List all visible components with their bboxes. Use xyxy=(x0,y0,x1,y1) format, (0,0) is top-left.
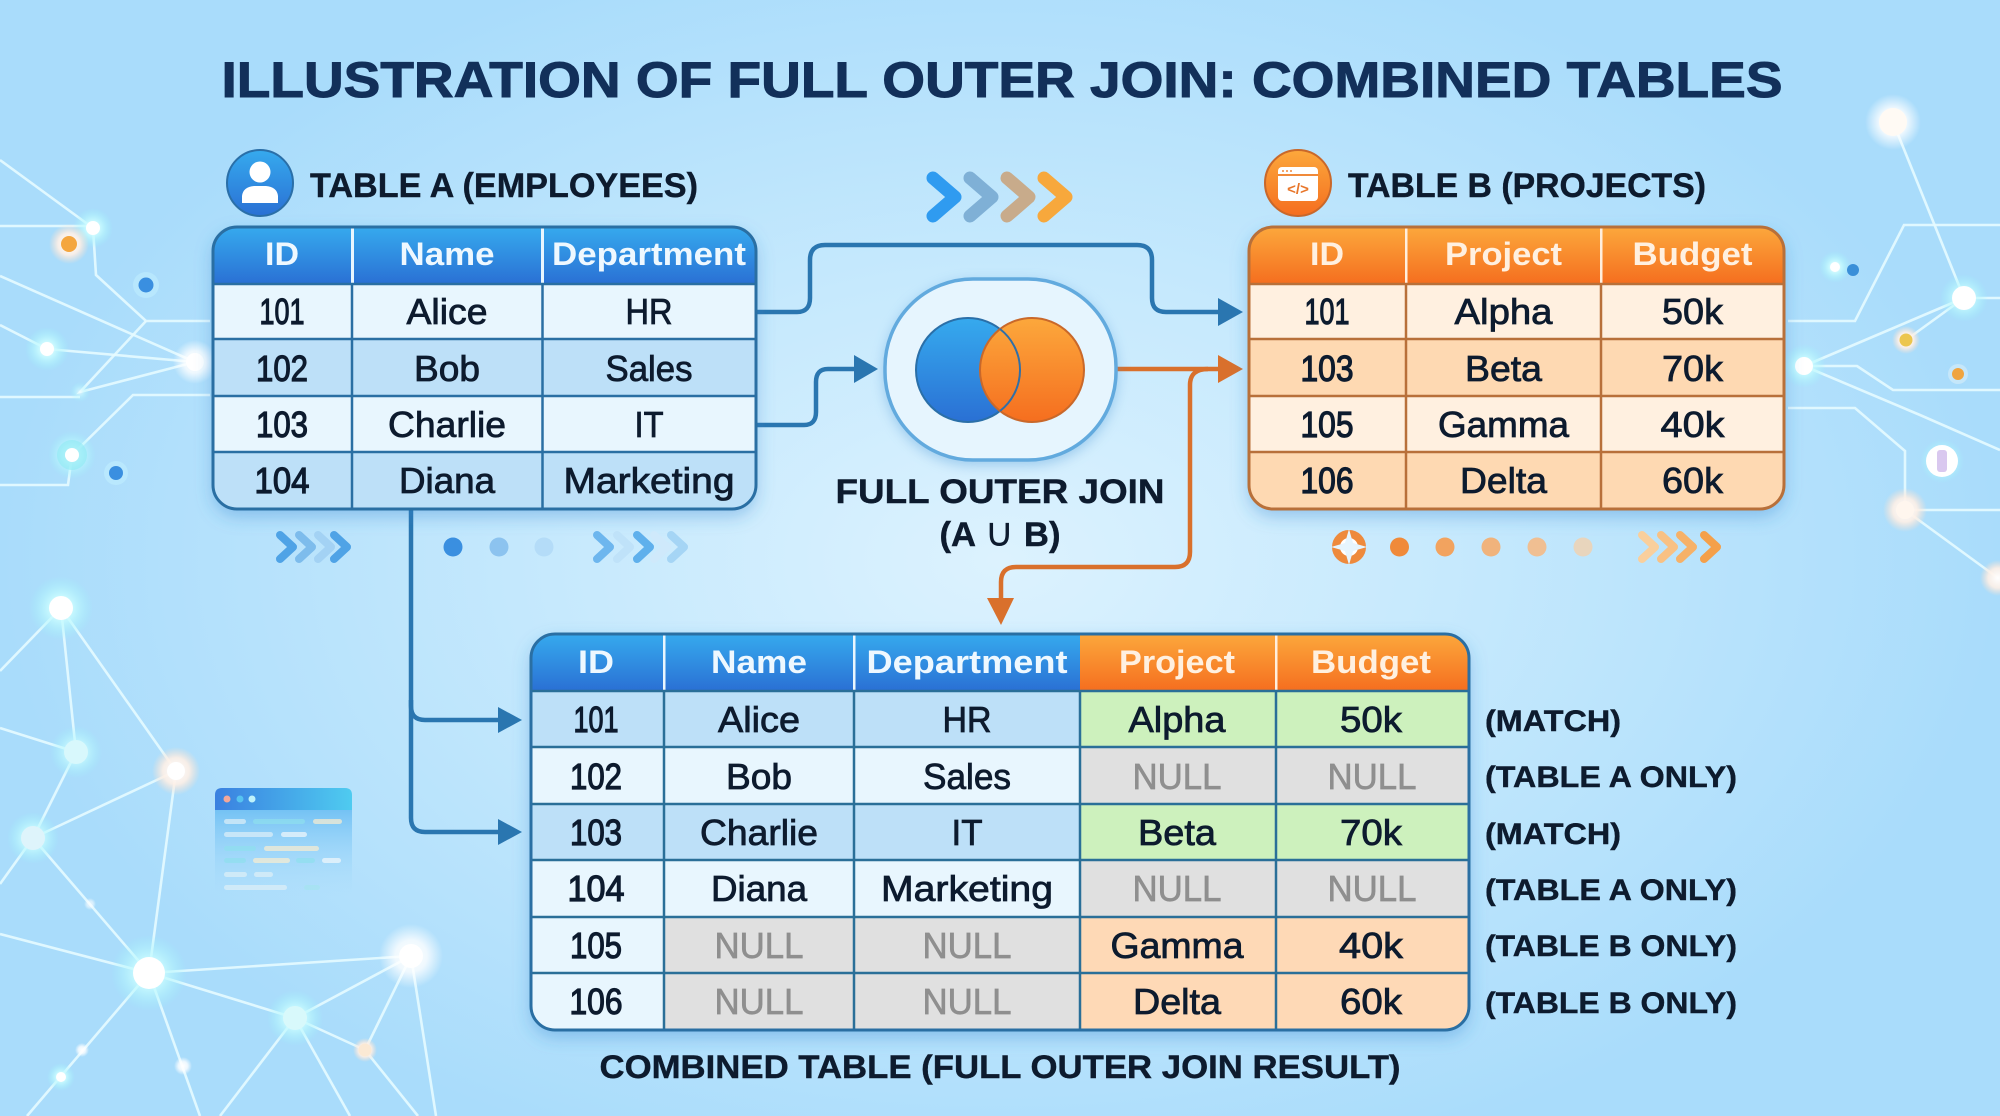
combined table rows: HR xyxy=(942,699,992,740)
Table B rows: 70k xyxy=(1662,348,1724,389)
Table A rows: 103 xyxy=(256,404,308,445)
arrow: join to combined table xyxy=(987,369,1208,625)
row status labels: (MATCH) xyxy=(1485,818,1621,851)
combined table rows: Gamma xyxy=(1110,925,1245,966)
row status labels: (TABLE B ONLY) xyxy=(1485,987,1737,1020)
icon: code window (Table B) xyxy=(1265,150,1331,216)
Table A rows: 104 xyxy=(254,460,310,501)
Table A rows: Bob xyxy=(414,348,480,389)
Table A header: ID xyxy=(265,236,299,272)
combined table rows: 102 xyxy=(570,756,622,797)
combined table rows xyxy=(568,699,1416,1022)
row status labels xyxy=(1485,705,1737,1020)
arrow: join to Table B xyxy=(1117,355,1243,383)
Table B rows: 105 xyxy=(1300,404,1354,445)
panel: Table B xyxy=(1249,227,1784,509)
panel: Table A xyxy=(213,227,756,509)
arrow: Table A rows to combined rows xyxy=(411,509,522,845)
row status labels: (TABLE A ONLY) xyxy=(1485,761,1737,794)
combined table header xyxy=(531,634,1469,691)
Table B rows: 103 xyxy=(1300,348,1354,389)
combined table rows: Sales xyxy=(923,756,1011,797)
Table A header: Name xyxy=(400,236,494,272)
combined table rows: Alice xyxy=(718,699,800,740)
Table B rows: Gamma xyxy=(1438,404,1570,445)
icon: code window (Table B): </> xyxy=(1287,181,1309,198)
decoration: Table A progress row xyxy=(280,535,684,559)
combined table rows: NULL xyxy=(1328,868,1416,909)
Table B rows: 101 xyxy=(1304,291,1350,332)
combined table rows: NULL xyxy=(1328,756,1416,797)
combined table rows: Charlie xyxy=(700,812,818,853)
panel: venn diagram xyxy=(885,279,1116,460)
Table A header: Department xyxy=(552,236,746,272)
combined table rows: Alpha xyxy=(1128,699,1227,740)
Table B rows: 40k xyxy=(1660,404,1726,445)
panel: combined table xyxy=(531,634,1469,1030)
Table B header: Budget xyxy=(1632,236,1753,272)
combined table header: Project xyxy=(1119,644,1235,680)
combined table rows: NULL xyxy=(714,981,804,1022)
combined table rows: NULL xyxy=(714,925,804,966)
Table A header xyxy=(213,227,756,284)
icon: person (Table A) xyxy=(227,150,293,216)
combined table rows: Beta xyxy=(1138,812,1217,853)
combined table rows: NULL xyxy=(1132,868,1222,909)
Table A rows: HR xyxy=(626,291,672,332)
combined table rows: Bob xyxy=(726,756,792,797)
combined table rows: 103 xyxy=(570,812,622,853)
combined table rows: Marketing xyxy=(881,868,1053,909)
arrow: Table A to join xyxy=(756,355,878,425)
row status labels: (TABLE B ONLY) xyxy=(1485,930,1737,963)
Table B rows: Alpha xyxy=(1454,291,1554,332)
label: full outer join xyxy=(836,473,1164,555)
combined table rows: 104 xyxy=(568,868,624,909)
Table A rows xyxy=(254,291,734,501)
chevrons: top centre flow xyxy=(933,178,1066,216)
Table B rows: Beta xyxy=(1465,348,1543,389)
combined table rows: 70k xyxy=(1340,812,1403,853)
Table B rows: 106 xyxy=(1300,460,1354,501)
Table A rows: 102 xyxy=(256,348,308,389)
Table B rows: 50k xyxy=(1662,291,1724,332)
label: full outer join: (A ∪ B) xyxy=(940,511,1060,555)
combined table rows: NULL xyxy=(922,981,1012,1022)
Table A rows: Marketing xyxy=(564,460,734,501)
combined table rows: NULL xyxy=(922,925,1012,966)
Table A rows: 101 xyxy=(260,291,304,332)
combined table rows: IT xyxy=(952,812,983,853)
Table B rows xyxy=(1300,291,1726,501)
Table B header: ID xyxy=(1310,236,1344,272)
label: full outer join: FULL OUTER JOIN xyxy=(836,473,1164,511)
combined table header: Budget xyxy=(1311,644,1431,680)
combined table rows: 105 xyxy=(570,925,622,966)
arrow: Table A to Table B xyxy=(756,245,1243,326)
Table B header xyxy=(1249,227,1784,284)
combined table rows: 106 xyxy=(570,981,622,1022)
combined table rows: 50k xyxy=(1340,699,1403,740)
combined table rows: Diana xyxy=(711,868,808,909)
row status labels: (TABLE A ONLY) xyxy=(1485,874,1737,907)
row status labels: (MATCH) xyxy=(1485,705,1621,738)
heading: Table B: TABLE B (PROJECTS) xyxy=(1348,167,1706,205)
combined table header: Name xyxy=(711,644,807,680)
heading: Table A: TABLE A (EMPLOYEES) xyxy=(310,167,698,205)
combined table rows: NULL xyxy=(1132,756,1222,797)
combined table rows: 40k xyxy=(1339,925,1404,966)
Table B rows: Delta xyxy=(1460,460,1548,501)
decoration: Table B progress row xyxy=(1331,529,1717,565)
combined table header: ID xyxy=(578,644,614,680)
combined table rows: Delta xyxy=(1133,981,1222,1022)
Table A rows: Charlie xyxy=(388,404,506,445)
Table A rows: Alice xyxy=(406,291,488,332)
Table A rows: Diana xyxy=(399,460,496,501)
icon: code window xyxy=(215,788,352,897)
caption: combined table: COMBINED TABLE (FULL OUTER JOIN RESULT) xyxy=(600,1049,1400,1085)
title: ILLUSTRATION OF FULL OUTER JOIN: COMBINED TABLES xyxy=(222,52,1782,108)
Table B header: Project xyxy=(1445,236,1562,272)
Table B rows: 60k xyxy=(1662,460,1724,501)
combined table header: Department xyxy=(866,644,1068,680)
combined table rows: 60k xyxy=(1340,981,1403,1022)
Table A rows: IT xyxy=(634,404,664,445)
combined table rows: 101 xyxy=(574,699,618,740)
Table A rows: Sales xyxy=(606,348,692,389)
